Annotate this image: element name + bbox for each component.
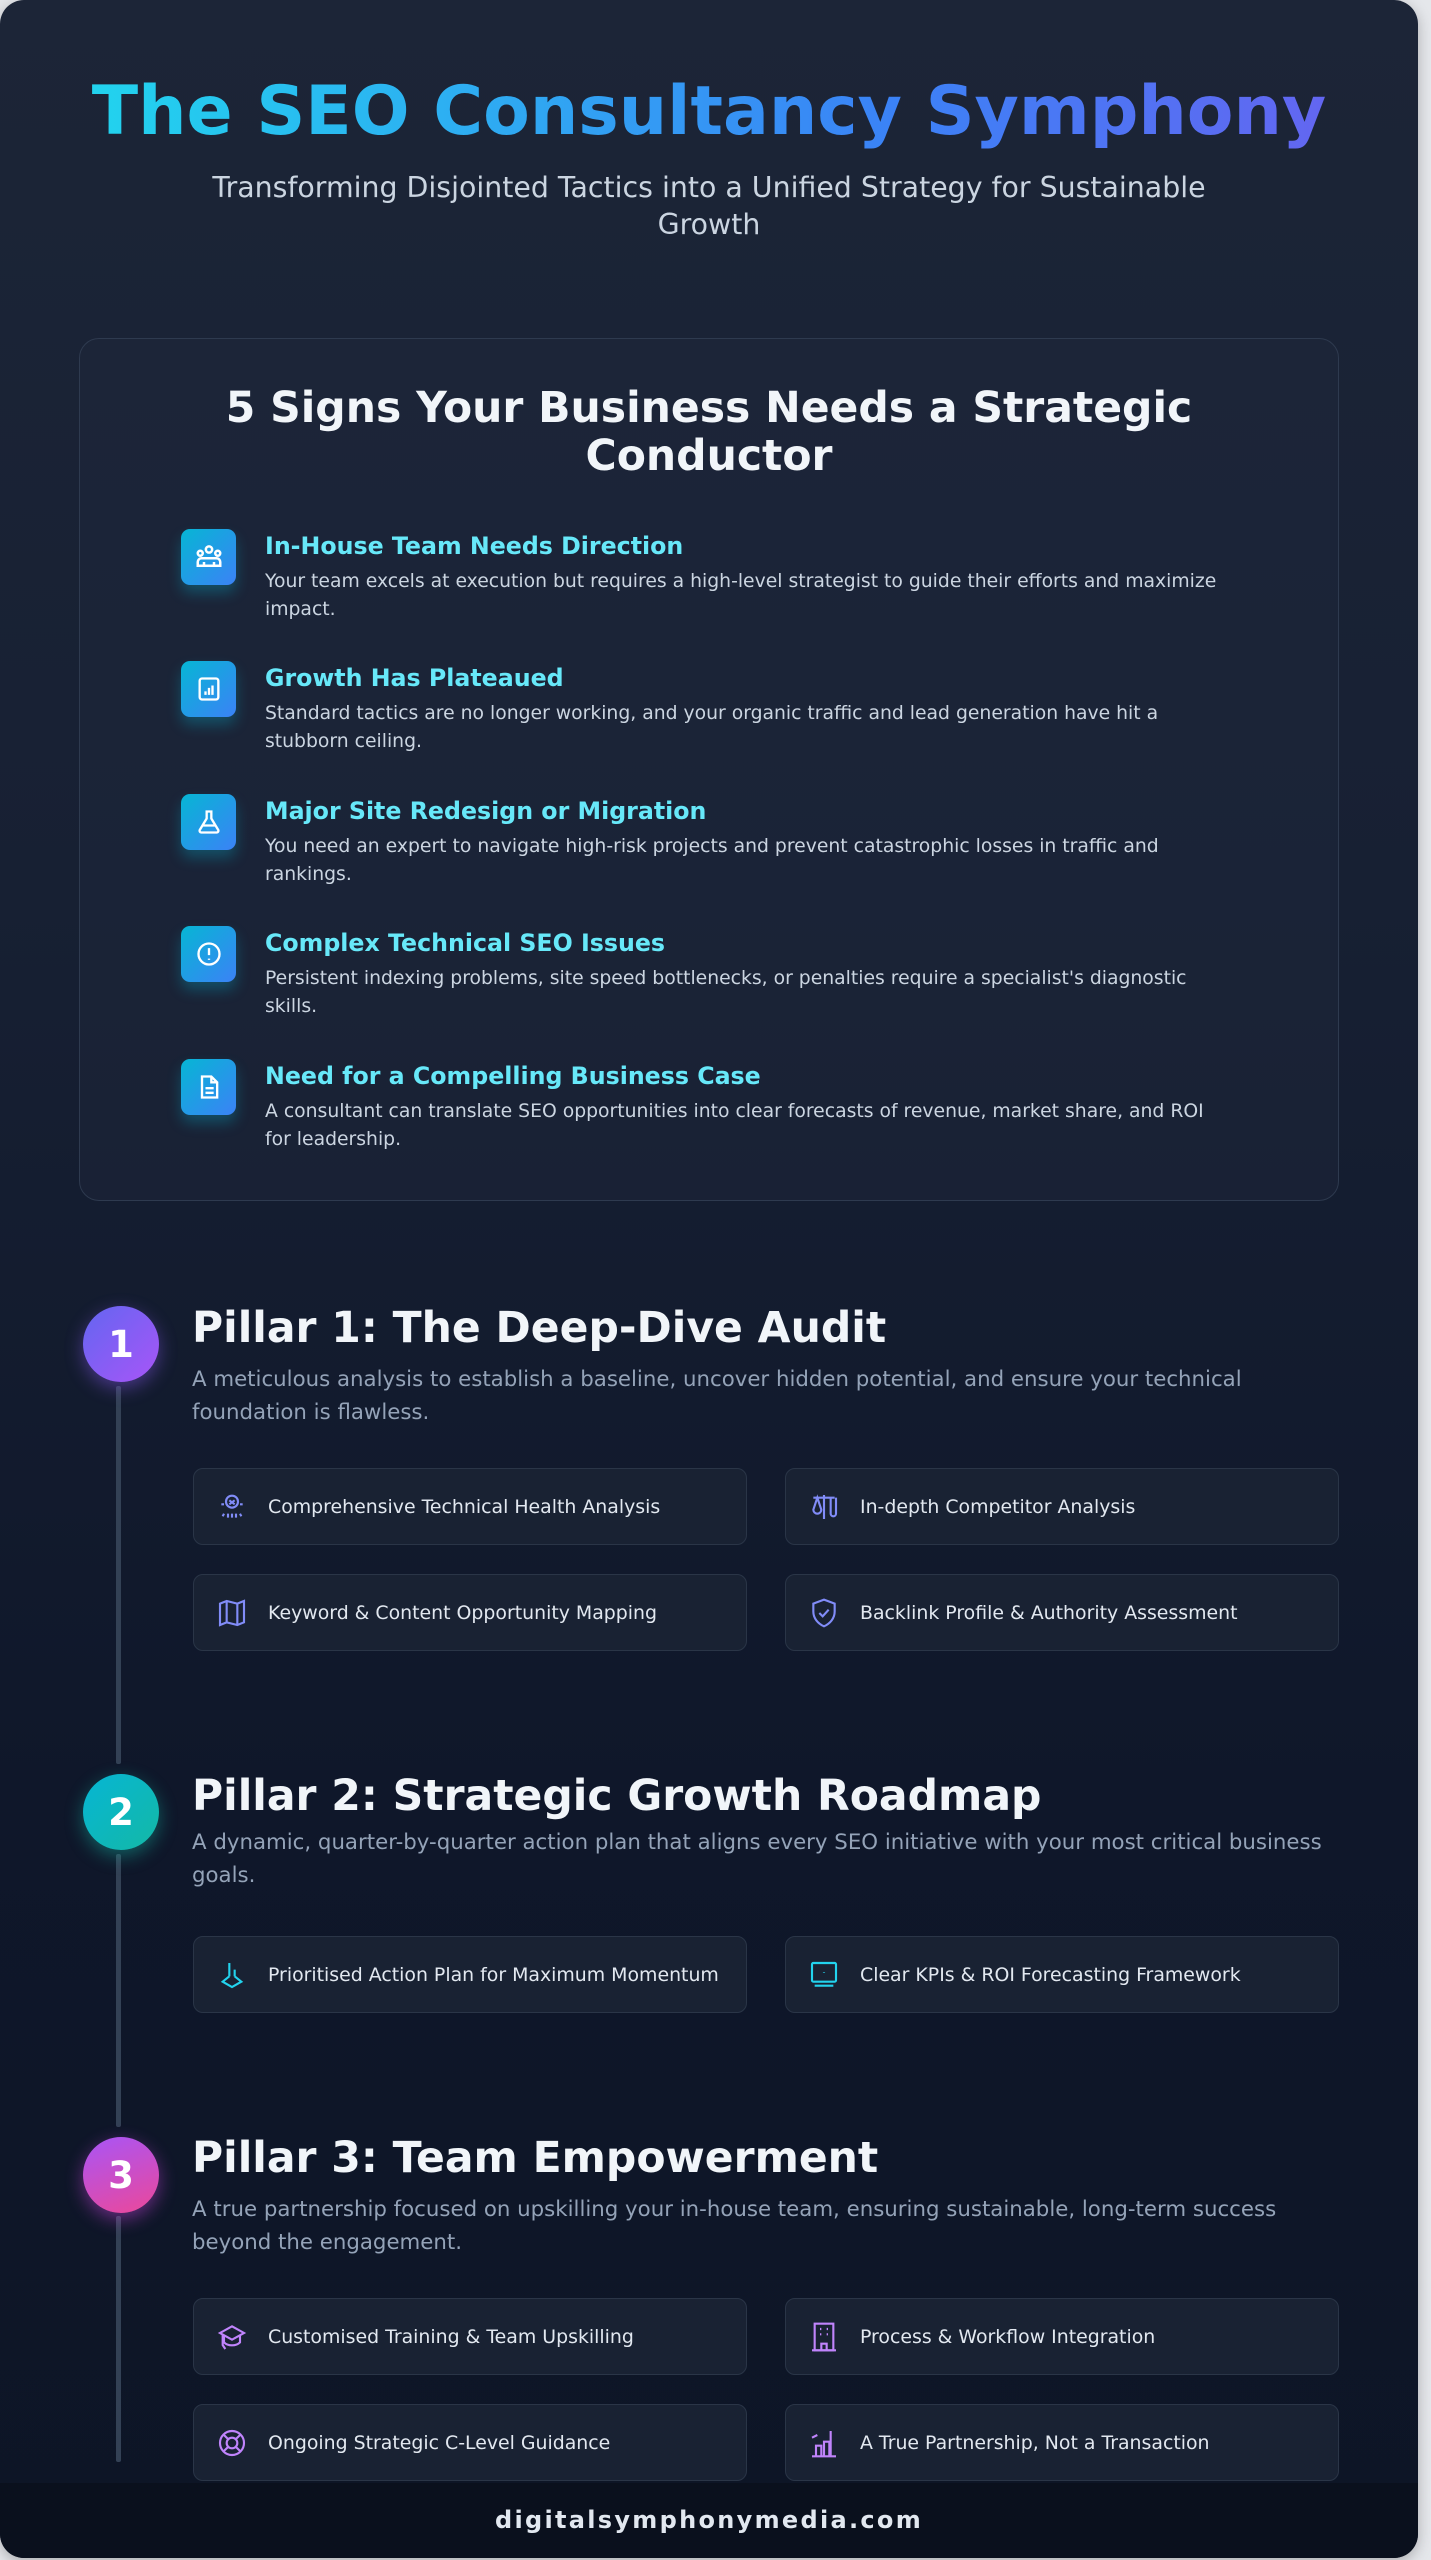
sign 4 <box>175 926 1186 1017</box>
pillar 3 badge <box>83 2137 159 2213</box>
sign 3: You need an expert to navigate high-risk projects and prevent catastrophic losses in traffic and <box>265 836 1159 857</box>
panel heading <box>226 384 1192 481</box>
feature: competitor: In-depth Competitor Analysis <box>860 1496 1135 1518</box>
sign 5 <box>175 1059 1204 1150</box>
icon: flask <box>181 794 236 850</box>
pillar 2 badge <box>83 1774 159 1850</box>
feature: action plan <box>193 1936 747 2013</box>
sign 2: Growth Has Plateaued <box>265 664 564 692</box>
pillar 3 description <box>192 2197 1276 2255</box>
sign 4: skills. <box>265 996 317 1017</box>
sign 3: rankings. <box>265 864 352 885</box>
icon: alert <box>181 926 236 982</box>
sign 5: for leadership. <box>265 1129 401 1150</box>
sign 2: stubborn ceiling. <box>265 731 422 752</box>
pillar 2 description: goals. <box>192 1863 255 1888</box>
sign 4: Persistent indexing problems, site speed bottlenecks, or penalties require a specialist's diagnostic <box>265 968 1186 989</box>
footer: digitalsymphonymedia.com <box>495 2506 923 2534</box>
feature: competitor <box>785 1468 1339 1545</box>
sign 2 <box>175 661 1158 752</box>
feature: technical health: Comprehensive Technical Health Analysis <box>268 1496 660 1518</box>
timeline line 3 <box>116 2216 121 2462</box>
feature: guidance: Ongoing Strategic C-Level Guidance <box>268 2432 610 2454</box>
pillar 2 heading: Pillar 2: Strategic Growth Roadmap <box>192 1772 1041 1821</box>
pillar 3 description: beyond the engagement. <box>192 2230 462 2255</box>
timeline line 2 <box>116 1854 121 2127</box>
feature: training <box>193 2298 747 2375</box>
timeline line 1 <box>116 1386 121 1764</box>
sign 1: impact. <box>265 599 336 620</box>
pillar 1 description: foundation is flawless. <box>192 1400 429 1425</box>
pillar 1 badge <box>83 1306 159 1382</box>
subtitle <box>212 171 1206 241</box>
feature: technical health <box>193 1468 747 1545</box>
pillar 1 badge: 1 <box>108 1322 134 1366</box>
feature: partnership: A True Partnership, Not a Transaction <box>860 2432 1210 2454</box>
sign 4: Complex Technical SEO Issues <box>265 929 665 957</box>
sign 5: Need for a Compelling Business Case <box>265 1062 761 1090</box>
pillar 3 description: A true partnership focused on upskilling your in-house team, ensuring sustainable, long-term success <box>192 2197 1276 2222</box>
sign 2: Standard tactics are no longer working, and your organic traffic and lead generation have hit a <box>265 703 1158 724</box>
feature: backlink: Backlink Profile & Authority Assessment <box>860 1602 1238 1624</box>
sign 5: A consultant can translate SEO opportunities into clear forecasts of revenue, market share, and ROI <box>265 1101 1204 1122</box>
feature: keyword mapping: Keyword & Content Opportunity Mapping <box>268 1602 657 1624</box>
icon: document <box>181 1059 236 1115</box>
panel heading: Conductor <box>586 432 832 481</box>
icon: chart <box>181 661 236 717</box>
subtitle: Transforming Disjointed Tactics into a Unified Strategy for Sustainable <box>212 171 1206 204</box>
pillar 1 description <box>192 1367 1242 1425</box>
feature: backlink <box>785 1574 1339 1651</box>
pillar 3 heading: Pillar 3: Team Empowerment <box>192 2134 878 2183</box>
subtitle: Growth <box>658 208 760 241</box>
pillar 3 badge: 3 <box>108 2154 134 2196</box>
footer <box>0 2483 1418 2558</box>
pillar 2 badge: 2 <box>108 1790 134 1834</box>
feature: KPIs: Clear KPIs & ROI Forecasting Framework <box>860 1964 1241 1986</box>
sign 1: In-House Team Needs Direction <box>265 532 683 560</box>
feature: guidance <box>193 2404 747 2481</box>
pillar 2 description: A dynamic, quarter-by-quarter action plan that aligns every SEO initiative with your most critical business <box>192 1830 1322 1855</box>
pillar 1 heading: Pillar 1: The Deep-Dive Audit <box>192 1304 886 1353</box>
pillar 1 description: A meticulous analysis to establish a baseline, uncover hidden potential, and ensure your technical <box>192 1367 1242 1392</box>
sign 3 <box>175 794 1159 885</box>
pillar 2 description <box>192 1830 1322 1888</box>
feature: process <box>785 2298 1339 2375</box>
feature: action plan: Prioritised Action Plan for Maximum Momentum <box>268 1964 719 1986</box>
sign 3: Major Site Redesign or Migration <box>265 797 706 825</box>
panel: 5 signs <box>79 338 1339 1201</box>
feature: training: Customised Training & Team Upskilling <box>268 2326 634 2348</box>
feature: KPIs <box>785 1936 1339 2013</box>
sign 1 <box>175 529 1216 620</box>
sign 1: Your team excels at execution but requires a high-level strategist to guide their efforts and maximize <box>265 571 1216 592</box>
panel heading: 5 Signs Your Business Needs a Strategic <box>226 384 1192 433</box>
title: The SEO Consultancy Symphony <box>92 72 1326 151</box>
feature: partnership <box>785 2404 1339 2481</box>
icon: team <box>181 529 236 585</box>
feature: process: Process & Workflow Integration <box>860 2326 1155 2348</box>
feature: keyword mapping <box>193 1574 747 1651</box>
